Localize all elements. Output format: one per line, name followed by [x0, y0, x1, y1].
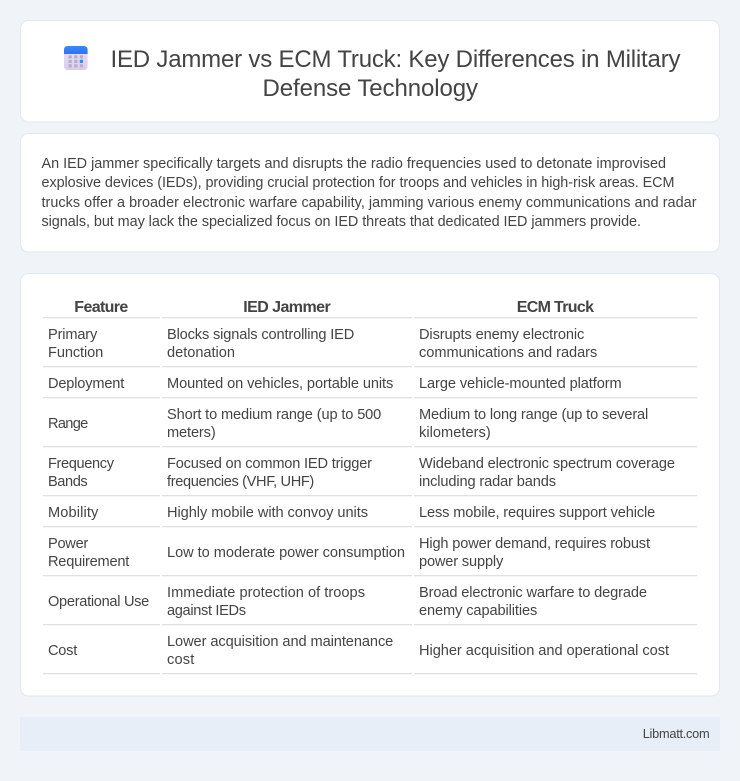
row: Frequency Bands: Frequency: [48, 456, 115, 472]
row: Primary Function: Disrupts enemy electronic: [419, 327, 584, 343]
row: Mobility: Highly mobile with convoy units: [167, 505, 368, 521]
row: Operational Use: [43, 585, 697, 625]
row: Mobility: Less mobile, requires support vehicle: [419, 505, 655, 521]
title: [110, 46, 680, 102]
row: Primary Function: detonation: [167, 345, 235, 361]
row: Range: kilometers): [419, 425, 491, 441]
row: Power Requirement: Power: [48, 536, 88, 552]
row: Range: [43, 407, 697, 447]
row: Operational Use: Broad electronic warfare to degrade: [419, 585, 647, 601]
row: Frequency Bands: [43, 456, 697, 496]
row: Power Requirement: High power demand, requires robust: [419, 536, 650, 552]
row: Range: Short to medium range (up to 500: [167, 407, 381, 423]
row: Cost: cost: [167, 652, 194, 668]
table header row: ECM Truck: [517, 299, 594, 316]
row: Frequency Bands: Focused on common IED trigger: [167, 456, 372, 472]
row: Range: Medium to long range (up to several: [419, 407, 648, 423]
row: Operational Use: enemy capabilities: [419, 603, 537, 619]
intro paragraph: trucks offer a broader electronic warfare capability, jamming various enemy communications and radar: [42, 195, 697, 211]
row: Frequency Bands: Bands: [48, 474, 88, 490]
panel: introduction: [20, 134, 720, 252]
row: Primary Function: Blocks signals controlling IED: [167, 327, 354, 343]
row: Frequency Bands: including radar bands: [419, 474, 556, 490]
table header row: Feature: [74, 299, 128, 316]
row: Deployment: Large vehicle-mounted platform: [419, 376, 622, 392]
row: Cost: Cost: [48, 643, 77, 659]
row: Primary Function: communications and radars: [419, 345, 597, 361]
header panel: [20, 20, 720, 122]
row: Power Requirement: Low to moderate power consumption: [167, 545, 405, 561]
row: Mobility: [43, 505, 697, 527]
row: Deployment: [43, 376, 697, 398]
row: Operational Use: Operational Use: [48, 594, 149, 610]
row: Power Requirement: Requirement: [48, 554, 129, 570]
title: IED Jammer vs ECM Truck: Key Differences in Military: [110, 46, 680, 73]
row: Range: meters): [167, 425, 216, 441]
row: Primary Function: Function: [48, 345, 103, 361]
row: Primary Function: Primary: [48, 327, 98, 343]
row: Cost: Higher acquisition and operational cost: [419, 643, 669, 659]
intro paragraph: explosive devices (IEDs), providing crucial protection for troops and vehicles in high-risk areas. ECM: [42, 175, 674, 191]
row: Cost: [43, 634, 697, 674]
title: Defense Technology: [262, 75, 478, 102]
footer credit: Libmatt.com: [643, 726, 710, 741]
row: Frequency Bands: Wideband electronic spectrum coverage: [419, 456, 675, 472]
row: Primary Function: [43, 327, 697, 367]
row: Mobility: Mobility: [48, 505, 99, 521]
row: Frequency Bands: frequencies (VHF, UHF): [167, 474, 314, 490]
row: Operational Use: against IEDs: [167, 603, 246, 619]
row: Power Requirement: [43, 536, 697, 576]
row: Cost: Lower acquisition and maintenance: [167, 634, 393, 650]
table header row: IED Jammer: [243, 299, 331, 316]
table header row: [43, 299, 697, 318]
panel: comparison table: [20, 274, 720, 696]
row: Operational Use: Immediate protection of troops: [167, 585, 365, 601]
icon: calendar: [64, 46, 88, 70]
row: Range: Range: [48, 416, 88, 432]
intro paragraph: signals, but may lack the specialized focus on IED threats that dedicated IED jammers provide.: [42, 214, 641, 230]
row: Power Requirement: power supply: [419, 554, 504, 570]
intro paragraph: [42, 156, 697, 230]
row: Deployment: Mounted on vehicles, portable units: [167, 376, 393, 392]
intro paragraph: An IED jammer specifically targets and disrupts the radio frequencies used to detonate improvised: [42, 156, 666, 172]
footer bar: [20, 717, 720, 751]
row: Deployment: Deployment: [48, 376, 124, 392]
